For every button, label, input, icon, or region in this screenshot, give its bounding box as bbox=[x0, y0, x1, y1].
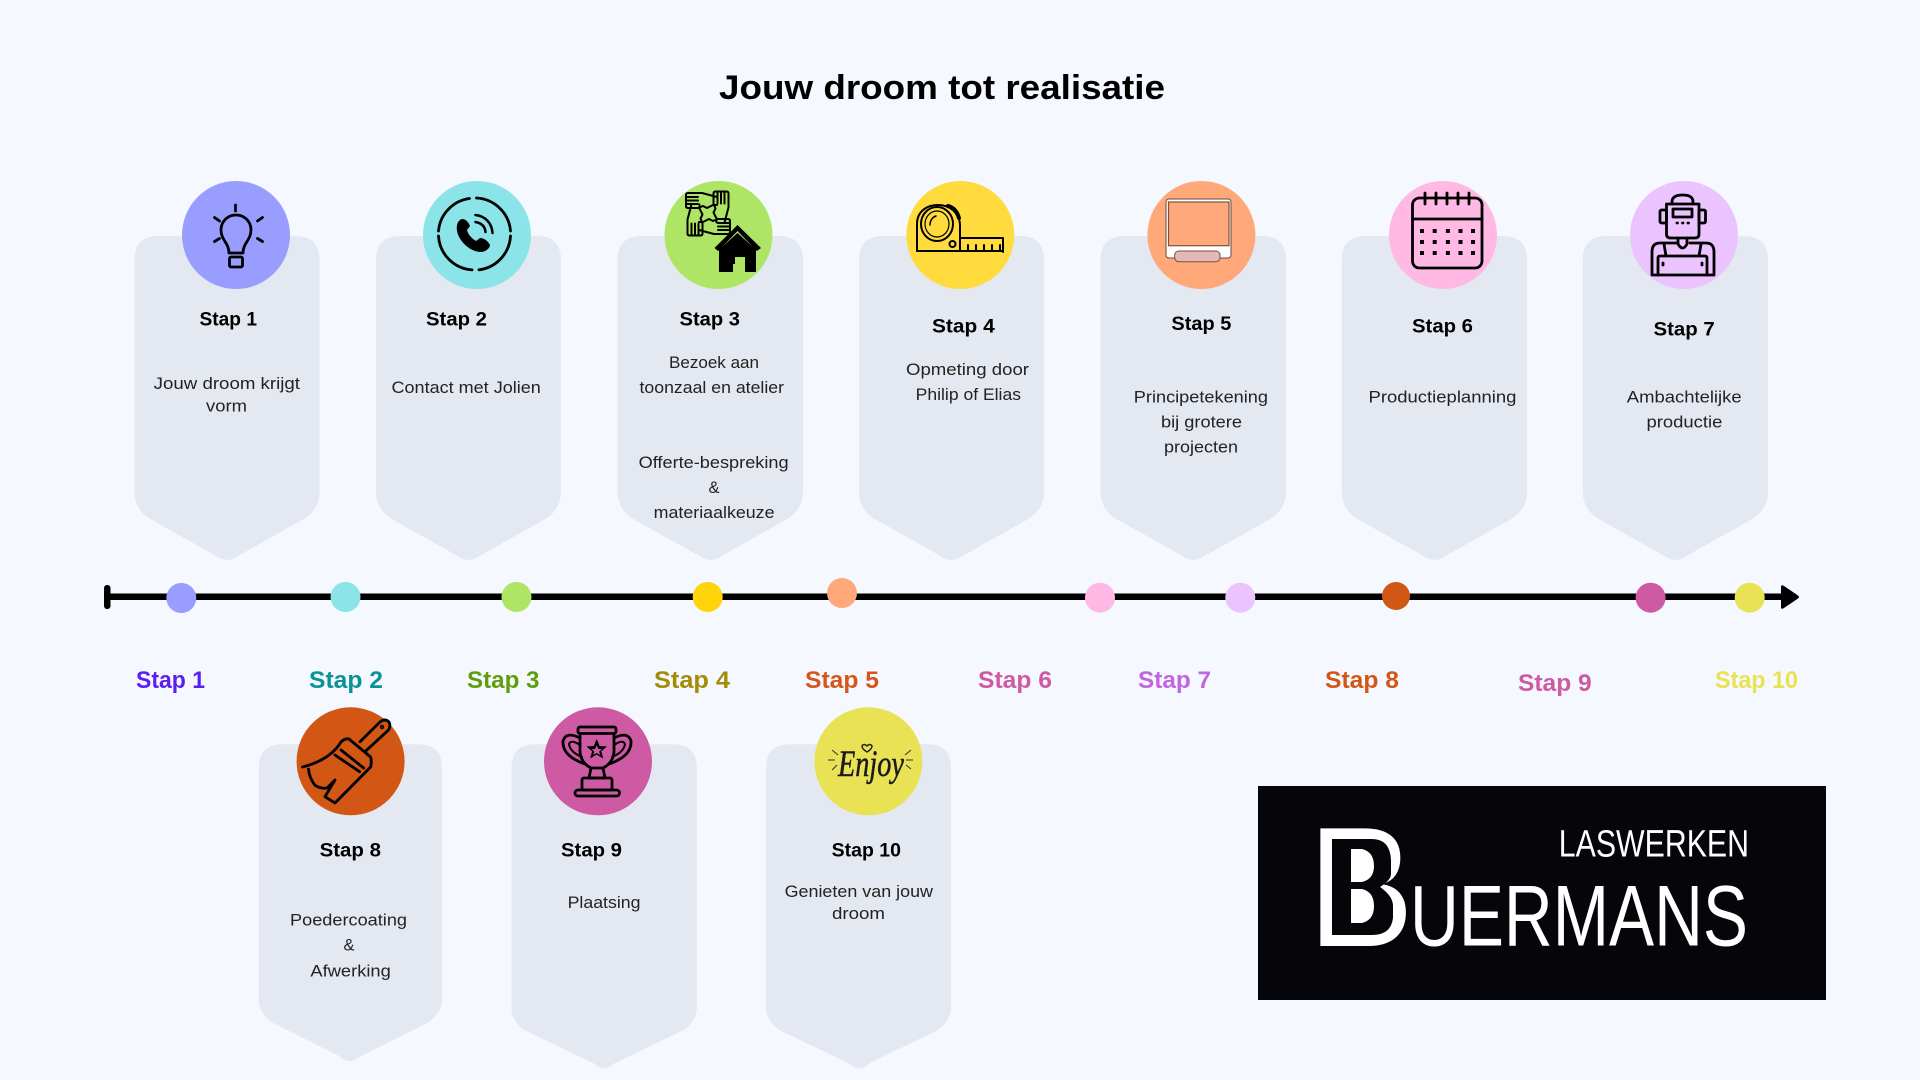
text: stap 6: Productieplanning bbox=[1368, 387, 1516, 406]
icon: light bulb bbox=[214, 205, 262, 267]
timeline labels: Stap 6 bbox=[978, 667, 1052, 694]
timeline labels: Stap 10 bbox=[1715, 667, 1798, 694]
text: stap 4 bbox=[906, 360, 1029, 404]
logo text: LASWERKEN: LASWERKEN bbox=[1559, 824, 1749, 866]
text: stap 5: bij grotere bbox=[1161, 412, 1242, 431]
panel: stap 9 bbox=[511, 707, 697, 1068]
timeline start cap bbox=[104, 585, 110, 609]
panel: stap 1 bbox=[134, 181, 320, 560]
text: stap 3: materiaalkeuze bbox=[654, 503, 774, 522]
text: stap 1: vorm bbox=[206, 396, 247, 415]
text: stap 1 bbox=[154, 374, 300, 415]
text: stap 10 bbox=[785, 882, 934, 923]
text: stap 7: Ambachtelijke bbox=[1627, 387, 1742, 406]
heading: stap 2: Stap 2 bbox=[426, 310, 487, 331]
timeline labels: Stap 3 bbox=[467, 667, 540, 694]
heading: stap 10: Stap 10 bbox=[832, 841, 901, 862]
icon: calendar bbox=[1412, 193, 1482, 268]
text: stap 3: Offerte-bespreking bbox=[639, 453, 789, 472]
icon: phone bbox=[438, 198, 510, 270]
heading: stap 7: Stap 7 bbox=[1654, 319, 1715, 340]
text: stap 5: Principetekening bbox=[1134, 387, 1268, 406]
title: Jouw droom tot realisatie bbox=[719, 69, 1165, 107]
panel: stap 2 bbox=[376, 181, 561, 560]
icon: hands and house bbox=[686, 192, 761, 272]
timeline labels: Stap 4 bbox=[654, 667, 731, 694]
timeline dots bbox=[166, 578, 1765, 613]
timeline labels: Stap 1 bbox=[136, 667, 205, 694]
panel: stap 4 bbox=[859, 181, 1044, 560]
text: stap 10: Genieten van jouw bbox=[785, 882, 934, 901]
panel: stap 5 bbox=[1100, 181, 1286, 560]
panel: stap 8 bbox=[259, 707, 442, 1061]
icon: paint brush bbox=[302, 720, 390, 803]
heading: stap 4: Stap 4 bbox=[932, 317, 995, 338]
text: stap 3: & bbox=[708, 478, 720, 497]
text: stap 5: projecten bbox=[1164, 437, 1238, 456]
text: stap 8: & bbox=[344, 936, 355, 955]
logo: Laswerken Buermans bbox=[1258, 786, 1826, 1000]
text: stap 8: Afwerking bbox=[310, 962, 391, 981]
panel: stap 3 bbox=[618, 181, 803, 560]
text: stap 4: Philip of Elias bbox=[916, 385, 1021, 404]
panel: stap 7 bbox=[1583, 181, 1768, 560]
timeline labels bbox=[136, 667, 1798, 697]
text: stap 3: toonzaal en atelier bbox=[640, 378, 784, 397]
text: stap 4: Opmeting door bbox=[906, 360, 1029, 379]
text: stap 9: Plaatsing bbox=[568, 893, 640, 912]
timeline labels: Stap 7 bbox=[1138, 667, 1211, 694]
timeline bbox=[104, 578, 1799, 613]
heading: stap 1: Stap 1 bbox=[200, 310, 257, 331]
text: stap 1: Jouw droom krijgt bbox=[154, 374, 300, 393]
panel: stap 6 bbox=[1342, 181, 1527, 560]
timeline labels: Stap 5 bbox=[805, 667, 879, 694]
heading: stap 8: Stap 8 bbox=[320, 841, 381, 862]
icon: computer screen bbox=[1166, 199, 1231, 262]
timeline arrow bbox=[1781, 585, 1799, 609]
text: stap 3: Bezoek aan bbox=[669, 353, 759, 372]
text: stap 10: droom bbox=[832, 904, 885, 923]
heading: stap 6: Stap 6 bbox=[1412, 317, 1473, 338]
text: stap 8 bbox=[290, 910, 407, 981]
icon: tape measure bbox=[917, 205, 1003, 252]
timeline labels: Stap 8 bbox=[1325, 667, 1399, 694]
heading: stap 5: Stap 5 bbox=[1171, 314, 1232, 335]
icon: trophy bbox=[563, 727, 631, 796]
panel: stap 10 bbox=[766, 707, 951, 1068]
text: stap 7 bbox=[1627, 387, 1742, 431]
logo text: UERMANS: UERMANS bbox=[1410, 869, 1748, 965]
icon: enjoy lettering: Enjoy bbox=[837, 744, 904, 785]
timeline labels: Stap 9 bbox=[1518, 670, 1592, 697]
text: stap 2: Contact met Jolien bbox=[392, 378, 541, 397]
text: stap 7: productie bbox=[1646, 412, 1722, 431]
heading: stap 9: Stap 9 bbox=[561, 841, 622, 862]
logo letter B: B bbox=[1311, 792, 1412, 983]
heading: stap 3: Stap 3 bbox=[680, 310, 740, 331]
text: stap 8: Poedercoating bbox=[290, 910, 407, 929]
timeline labels: Stap 2 bbox=[309, 667, 383, 694]
icon: welder bbox=[1652, 195, 1714, 275]
text: stap 5 bbox=[1134, 387, 1268, 456]
text: stap 3 bbox=[639, 353, 789, 522]
